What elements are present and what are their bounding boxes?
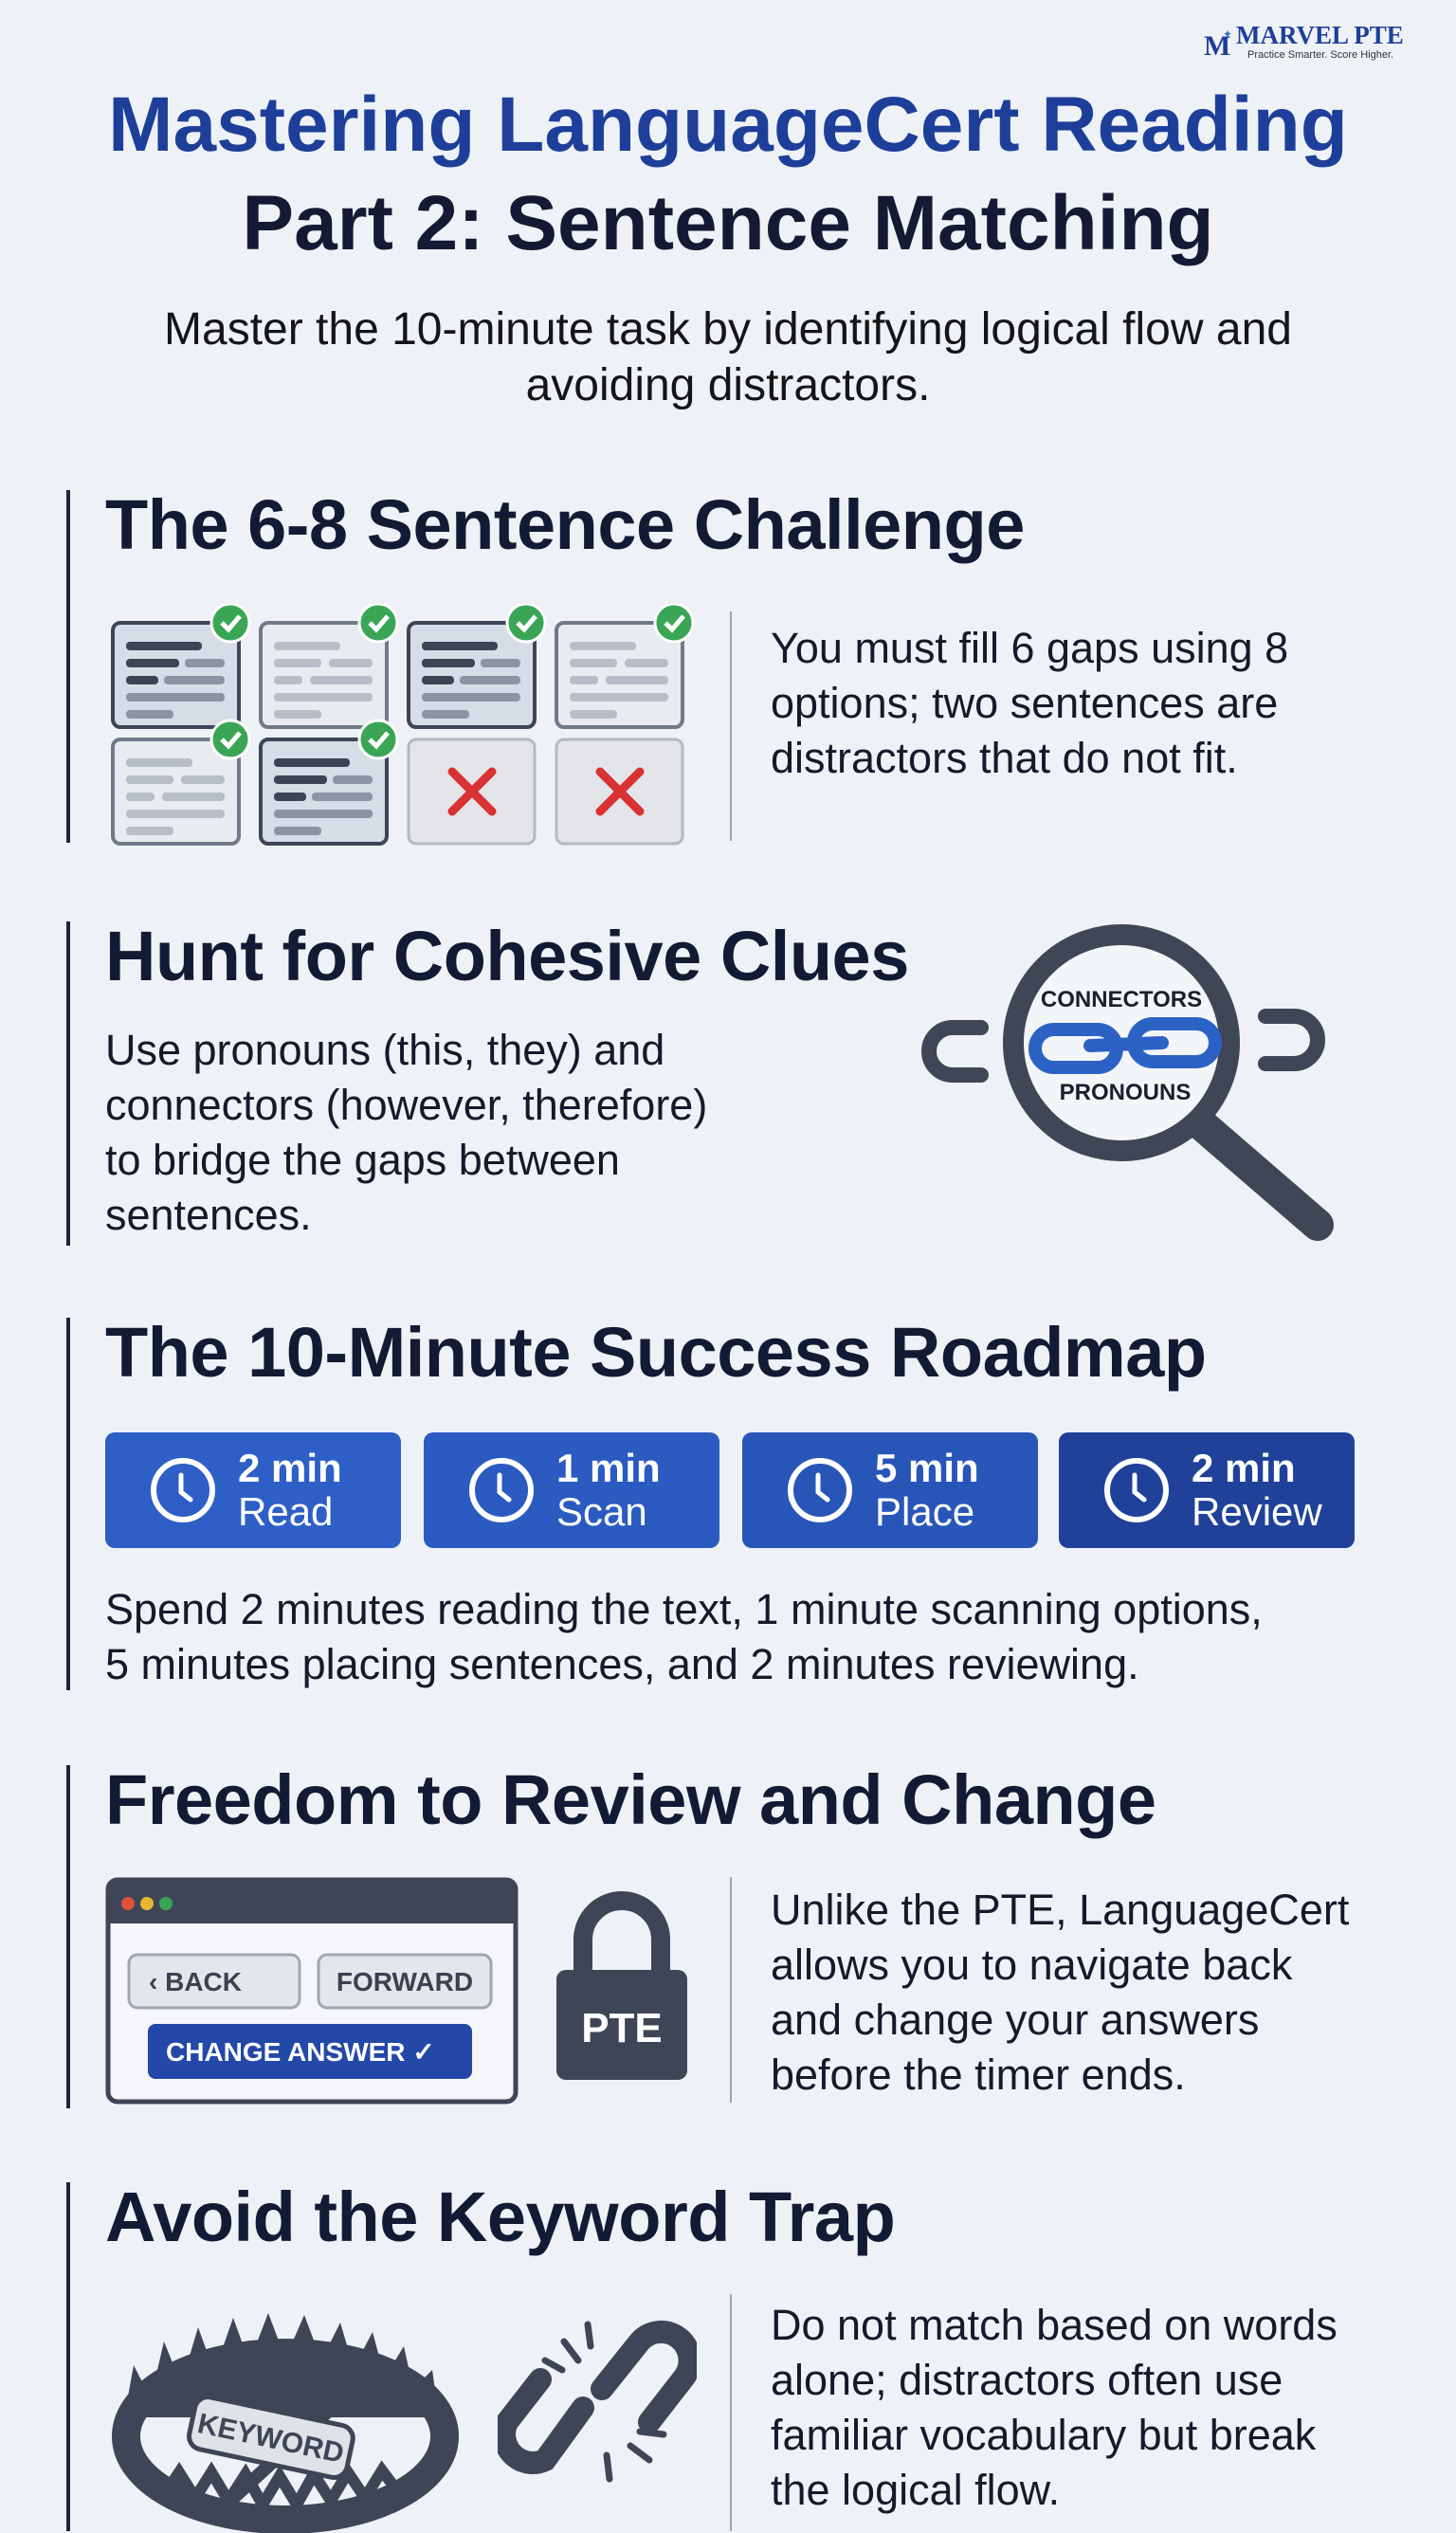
- text: connectors (however, therefore): [105, 1081, 707, 1129]
- box: read: 2 min: [238, 1446, 342, 1490]
- icon: browser window: FORWARD: [337, 1967, 473, 1996]
- heading: The 10-Minute Success Roadmap: [105, 1313, 1207, 1392]
- title: [108, 82, 1348, 266]
- title: Part 2: Sentence Matching: [242, 180, 1214, 266]
- logo: ✦: [1223, 27, 1232, 41]
- subtitle: Master the 10-minute task by identifying logical flow and avoiding distractors.: [164, 304, 1292, 410]
- heading: Hunt for Cohesive Clues: [105, 917, 909, 995]
- timeline boxes: [105, 1432, 1355, 1548]
- section 1: challenge: [66, 485, 1288, 846]
- box: scan: 1 min: [556, 1446, 661, 1490]
- logo: Practice Smarter. Score Higher.: [1247, 49, 1393, 61]
- box: read: Read: [238, 1489, 333, 1534]
- box: review: Review: [1192, 1489, 1322, 1534]
- title: Mastering LanguageCert Reading: [108, 82, 1348, 168]
- box: scan: Scan: [556, 1489, 647, 1534]
- icon: magnifier: PRONOUNS: [1060, 1080, 1191, 1105]
- box: place: 5 min: [875, 1446, 979, 1490]
- icon: browser window: [106, 1877, 518, 2105]
- roadmap text: [105, 1585, 1263, 1688]
- heading: Avoid the Keyword Trap: [105, 2178, 895, 2256]
- logo: MARVEL PTE: [1236, 21, 1404, 49]
- text: [105, 1026, 707, 1239]
- heading: The 6-8 Sentence Challenge: [105, 485, 1025, 564]
- text: Use pronouns (this, they) and: [105, 1026, 664, 1074]
- icon: PTE lock: PTE: [581, 2005, 663, 2051]
- logo: [1204, 21, 1404, 61]
- heading: Freedom to Review and Change: [105, 1760, 1156, 1839]
- section 5: keyword trap: [66, 2178, 1338, 2533]
- text: Do not match based on words alone; distractors often use familiar vocabulary but break the logical flow.: [771, 2301, 1338, 2514]
- roadmap text: 5 minutes placing sentences, and 2 minutes reviewing.: [105, 1640, 1139, 1688]
- icon: magnifier: [921, 924, 1334, 1241]
- text: sentences.: [105, 1191, 312, 1239]
- box: review: 2 min: [1192, 1446, 1296, 1490]
- section 4: freedom: [66, 1760, 1350, 2108]
- icon: magnifier: CONNECTORS: [1041, 987, 1202, 1012]
- icon: browser window: CHANGE ANSWER ✓: [166, 2037, 435, 2067]
- box: place: Place: [875, 1489, 974, 1534]
- icon: browser window: ‹ BACK: [149, 1967, 242, 1996]
- box: read: [105, 1432, 401, 1548]
- icon: broken chain: [498, 2321, 697, 2482]
- icon: PTE lock: [556, 1891, 687, 2080]
- roadmap text: Spend 2 minutes reading the text, 1 minute scanning options,: [105, 1585, 1263, 1633]
- box: scan: [424, 1432, 719, 1548]
- icon: sentence cards grid: [111, 604, 694, 846]
- box: place: [742, 1432, 1038, 1548]
- text: to bridge the gaps between: [105, 1136, 620, 1184]
- icon: bear trap: [112, 2313, 459, 2533]
- section 2: cohesive clues: [66, 917, 1334, 1246]
- icon: bear trap: KEYWORD: [195, 2408, 347, 2469]
- section 3: roadmap: [66, 1313, 1207, 1690]
- text: You must fill 6 gaps using 8 options; two sentences are distractors that do not fit.: [771, 624, 1288, 782]
- box: review: [1059, 1432, 1355, 1548]
- text: Unlike the PTE, LanguageCert allows you to navigate back and change your answers before the timer ends.: [771, 1886, 1349, 2099]
